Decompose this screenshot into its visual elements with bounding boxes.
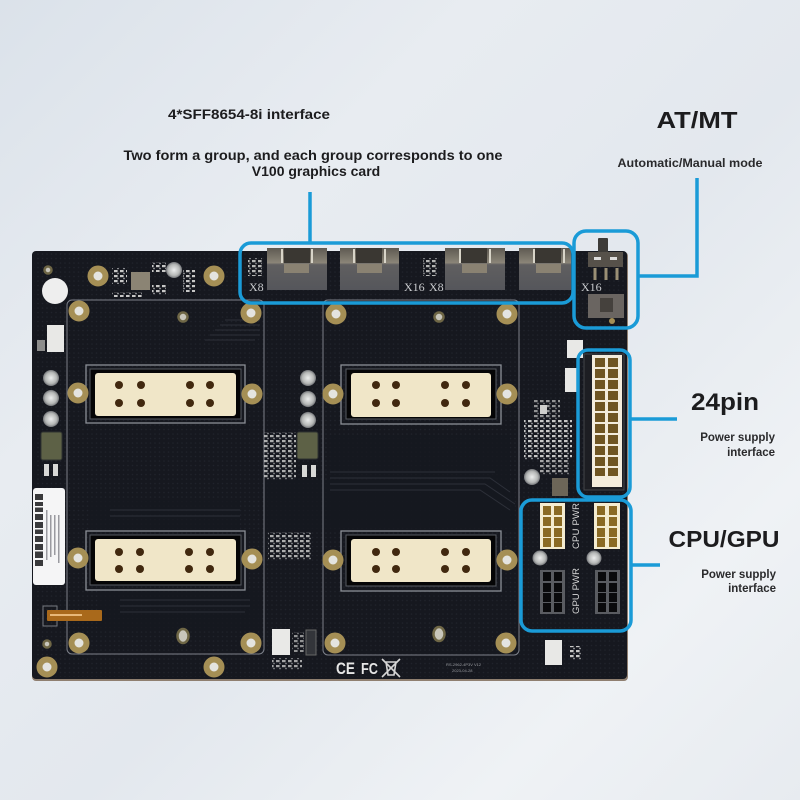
leader line: SFF8654: [308, 192, 312, 243]
heading: SFF8654 interface: 4*SFF8654-8i interface: [168, 106, 330, 122]
mounting standoffs: [40, 268, 514, 674]
CPU PWR silkscreen: CPU PWR: [571, 503, 582, 549]
description: 24pin: Power supply: [700, 432, 776, 444]
small white parts: [44, 464, 316, 477]
socket: bottom right: [341, 531, 501, 591]
white headers right: [565, 340, 583, 392]
circuit board: [32, 238, 628, 681]
connector silkscreen labels: X16: [581, 280, 602, 294]
heading: 24pin: 24pin: [691, 389, 759, 416]
revision text: RS-2962-4P3V V12: [446, 662, 482, 667]
leader line: 24pin: [630, 417, 677, 421]
GPU power connectors: [540, 570, 620, 614]
fan header left: [37, 325, 64, 352]
connector 1: [267, 248, 327, 290]
heading: AT/MT: AT/MT: [656, 107, 738, 133]
description: 24pin: [700, 432, 776, 459]
AT/MT switch: [588, 238, 624, 324]
description: CPU/GPU: Power supply: [701, 569, 777, 581]
certification marks: CE: [336, 659, 355, 678]
callout box: CPU/GPU: [521, 500, 631, 631]
connector silkscreen labels: X8: [429, 280, 444, 294]
revision text: 2023-04-28: [452, 668, 473, 673]
inductors: [41, 432, 318, 460]
SFF8654 connectors: [248, 248, 602, 294]
description: AT/MT: Automatic/Manual mode: [618, 158, 762, 170]
description: 24pin: interface: [727, 447, 775, 459]
GPU PWR silkscreen: GPU PWR: [571, 568, 582, 614]
socket: top right: [341, 365, 501, 424]
callout box: SFF8654 interfaces: [240, 243, 573, 303]
fan header lower right: [545, 640, 582, 665]
connector 3: [445, 248, 505, 290]
small pads: [44, 266, 444, 648]
connector silkscreen labels: [249, 280, 602, 294]
barcode sticker: [33, 488, 65, 585]
white disc buzzer: [42, 278, 68, 304]
description: SFF8654: V100 graphics card: [252, 163, 380, 179]
fan header bottom: [272, 629, 316, 655]
socket: top left: [86, 365, 245, 423]
certification marks: [336, 659, 400, 678]
connector silkscreen labels: X16: [404, 280, 425, 294]
outline: right module panel: [323, 300, 519, 655]
top power chip cluster: [112, 262, 195, 297]
heading: CPU/GPU: CPU/GPU: [668, 526, 780, 552]
description: SFF8654: Two form a group, and each group corresponds to one: [124, 147, 503, 163]
connector 4: [519, 248, 571, 290]
description: CPU/GPU: interface: [728, 583, 776, 595]
orange flex cable: [43, 606, 102, 626]
capacitors: [43, 262, 602, 566]
description: CPU/GPU: [701, 569, 777, 595]
24pin connector: [584, 354, 624, 490]
socket: bottom left: [86, 531, 245, 590]
connector 2: [340, 248, 399, 290]
leader line: CPU/GPU: [631, 563, 660, 567]
description: SFF8654: [124, 147, 503, 179]
certification marks: FC: [361, 661, 378, 678]
revision text: [446, 662, 482, 673]
component clusters: [264, 400, 572, 670]
leader line: AT/MT: [638, 178, 697, 276]
CPU power connectors: [540, 503, 620, 549]
outline: left module panel: [67, 300, 264, 654]
callout box: 24pin: [578, 350, 630, 497]
callout box: AT/MT switch: [574, 231, 638, 328]
connector silkscreen labels: X8: [249, 280, 264, 294]
